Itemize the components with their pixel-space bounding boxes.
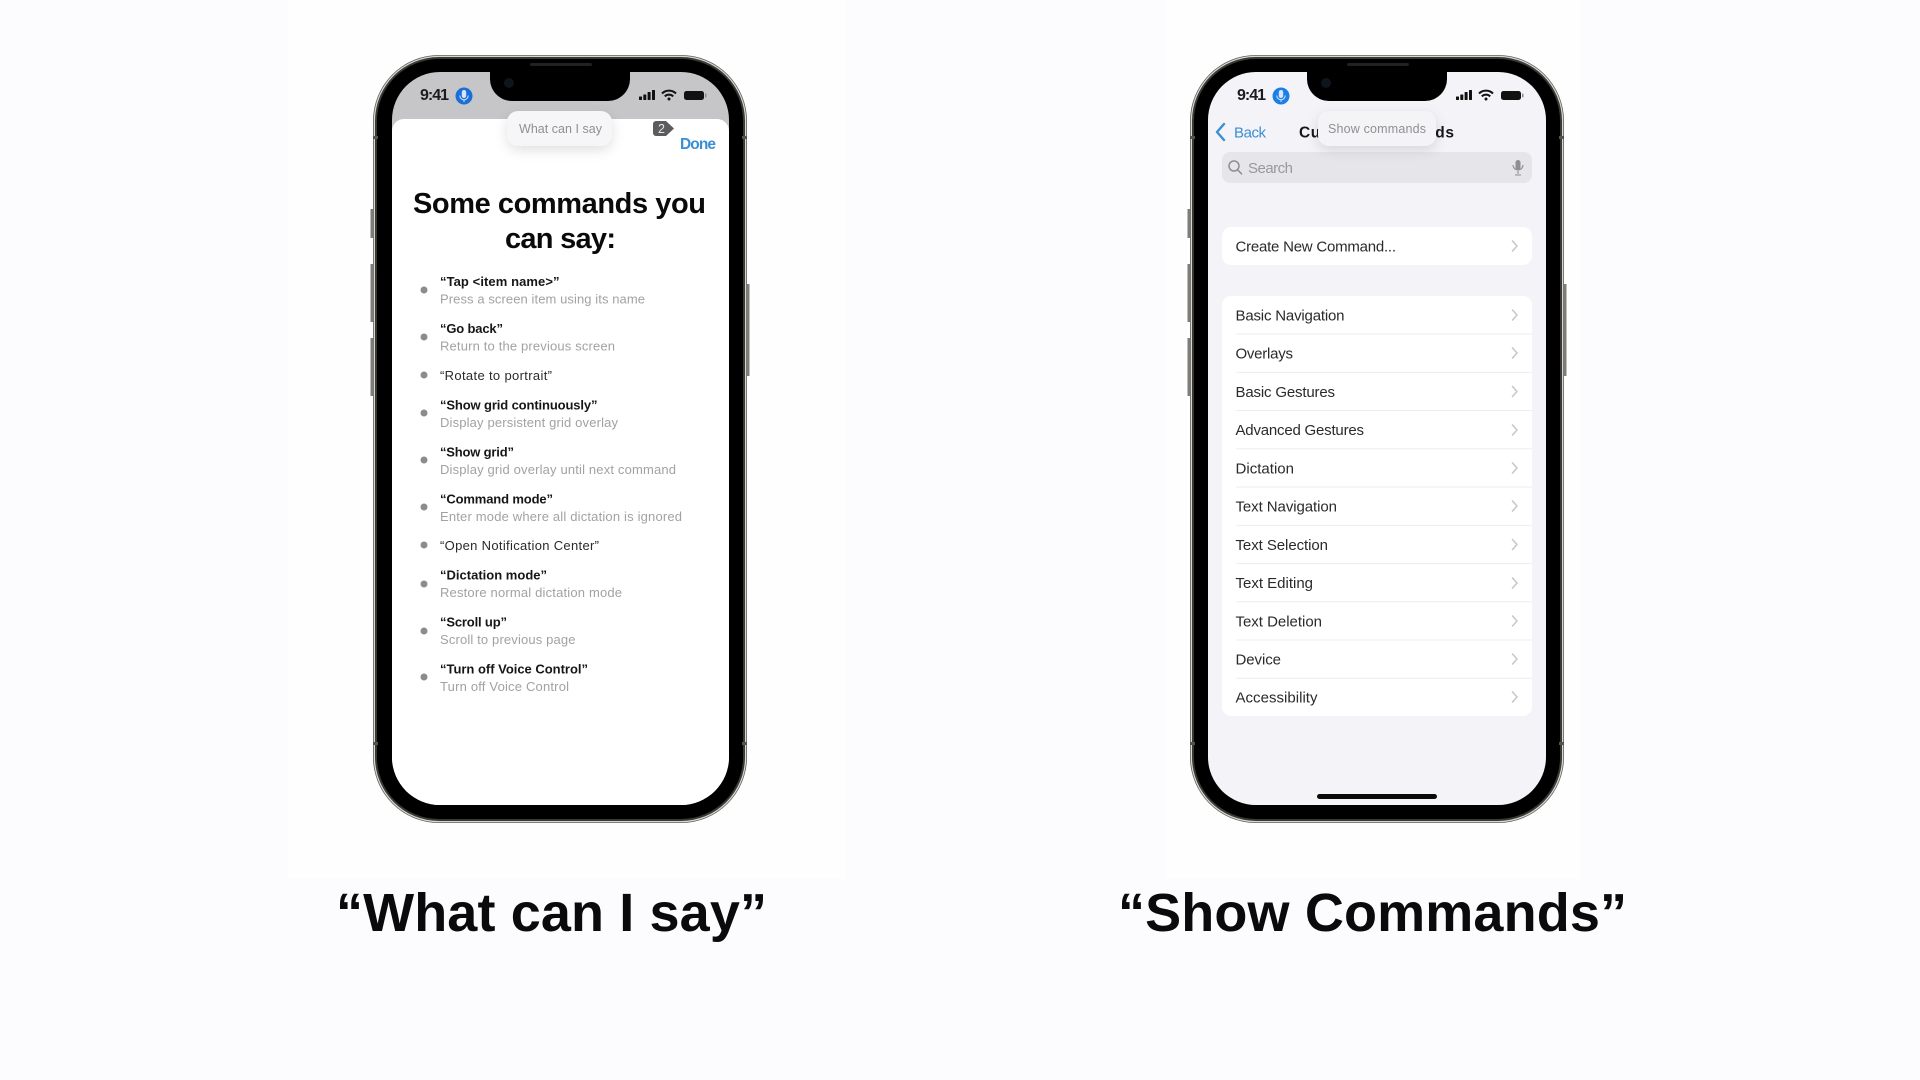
row: text selection <box>1236 537 1517 554</box>
row: advanced gestures <box>1236 422 1517 439</box>
command: dictation mode: “Dictation mode” <box>440 568 547 582</box>
command: go back <box>420 321 615 354</box>
status bar: 9:41 <box>420 87 449 104</box>
command: turn off: Turn off Voice Control <box>440 679 569 694</box>
command: tap item: Press a screen item using its name <box>440 292 645 306</box>
command: go back: Return to the previous screen <box>440 338 615 354</box>
command: go back: “Go back” <box>440 321 503 336</box>
icon: wifi <box>1479 91 1493 100</box>
row: text deletion: Text Deletion <box>1236 614 1322 630</box>
number badge: 2 <box>658 122 665 136</box>
icon: microphone badge <box>1272 88 1290 104</box>
icon: microphone badge <box>456 88 472 104</box>
Done button: Done <box>680 136 716 153</box>
command: show grid <box>420 444 676 477</box>
command: show grid: “Show grid” <box>440 444 514 460</box>
caption: Show Commands: “Show Commands” <box>1118 883 1627 943</box>
command: scroll up <box>420 614 576 647</box>
row: text deletion <box>1236 614 1517 630</box>
row: overlays <box>1236 346 1517 362</box>
command: scroll up: Scroll to previous page <box>440 632 576 647</box>
command: tap item: “Tap <item name>” <box>440 274 560 289</box>
row: text navigation: Text Navigation <box>1236 498 1337 516</box>
settings list <box>1222 296 1532 716</box>
screen heading <box>413 188 706 255</box>
icon: wifi <box>662 91 676 100</box>
status bar <box>420 87 706 104</box>
row: text editing: Text Editing <box>1236 575 1313 592</box>
command: dictation mode <box>420 568 622 600</box>
row: basic navigation: Basic Navigation <box>1236 308 1344 324</box>
row: accessibility: Accessibility <box>1236 690 1318 706</box>
command: show grid continuously <box>420 398 618 430</box>
row: dictation <box>1236 460 1517 478</box>
icon: signal <box>639 90 655 100</box>
row: accessibility <box>1236 690 1517 706</box>
voice bubble: What can I say: What can I say <box>519 122 603 136</box>
search bar <box>1222 152 1532 183</box>
command: turn off: “Turn off Voice Control” <box>440 662 588 676</box>
screen heading: Some commands you <box>413 188 706 220</box>
row: device: Device <box>1236 652 1281 668</box>
phone frame <box>1188 55 1566 823</box>
row: basic gestures <box>1236 384 1517 401</box>
back button <box>1217 124 1266 142</box>
command: tap item <box>420 274 645 306</box>
back button: Back <box>1234 124 1266 142</box>
command: notification center: “Open Notification Center” <box>440 538 599 553</box>
command: dictation mode: Restore normal dictation mode <box>440 585 622 600</box>
command: scroll up: “Scroll up” <box>440 614 507 630</box>
command: rotate: “Rotate to portrait” <box>440 368 552 383</box>
icon: battery <box>1501 91 1524 100</box>
caption: What can I say: “What can I say” <box>336 883 767 943</box>
command: show grid continuously: “Show grid continuously” <box>440 398 598 412</box>
row: basic navigation <box>1236 308 1517 324</box>
screen <box>1208 72 1546 805</box>
search bar: Search <box>1248 160 1293 177</box>
row: text selection: Text Selection <box>1236 537 1328 554</box>
status bar: 9:41 <box>1237 87 1266 104</box>
create new command row <box>1222 227 1532 265</box>
create new command row: Create New Command... <box>1236 238 1396 256</box>
screen <box>392 72 729 805</box>
icon: signal <box>1456 90 1472 100</box>
row: text editing <box>1236 575 1517 592</box>
notch with camera and speaker <box>490 63 630 101</box>
command: command mode <box>420 492 682 524</box>
command: command mode: “Command mode” <box>440 492 553 506</box>
phone frame <box>370 55 750 823</box>
icon: magnifier <box>1229 161 1242 174</box>
icon: battery <box>684 91 706 100</box>
row: basic gestures: Basic Gestures <box>1236 384 1335 401</box>
row: text navigation <box>1236 498 1517 516</box>
command list <box>420 274 682 694</box>
command: command mode: Enter mode where all dictation is ignored <box>440 509 682 524</box>
command: show grid: Display grid overlay until next command <box>440 462 676 477</box>
row: advanced gestures: Advanced Gestures <box>1236 422 1364 439</box>
command: turn off <box>420 662 588 694</box>
command: show grid continuously: Display persistent grid overlay <box>440 415 618 430</box>
row: dictation: Dictation <box>1236 460 1294 478</box>
voice bubble: Show commands: Show commands <box>1328 122 1426 136</box>
nav title: Custom Commands <box>1299 124 1454 142</box>
icon: microphone <box>1513 160 1523 175</box>
number badge <box>653 121 674 136</box>
screen heading: can say: <box>505 223 616 255</box>
voice bubble: What can I say <box>507 111 612 146</box>
row: device <box>1236 652 1517 668</box>
voice bubble: Show commands <box>1318 111 1436 146</box>
row: overlays: Overlays <box>1236 346 1293 362</box>
phone: what can I say <box>370 55 750 823</box>
home indicator <box>1317 794 1437 799</box>
phone: show commands <box>1188 55 1566 823</box>
status bar <box>1237 87 1524 104</box>
notch with camera and speaker <box>1307 63 1447 101</box>
